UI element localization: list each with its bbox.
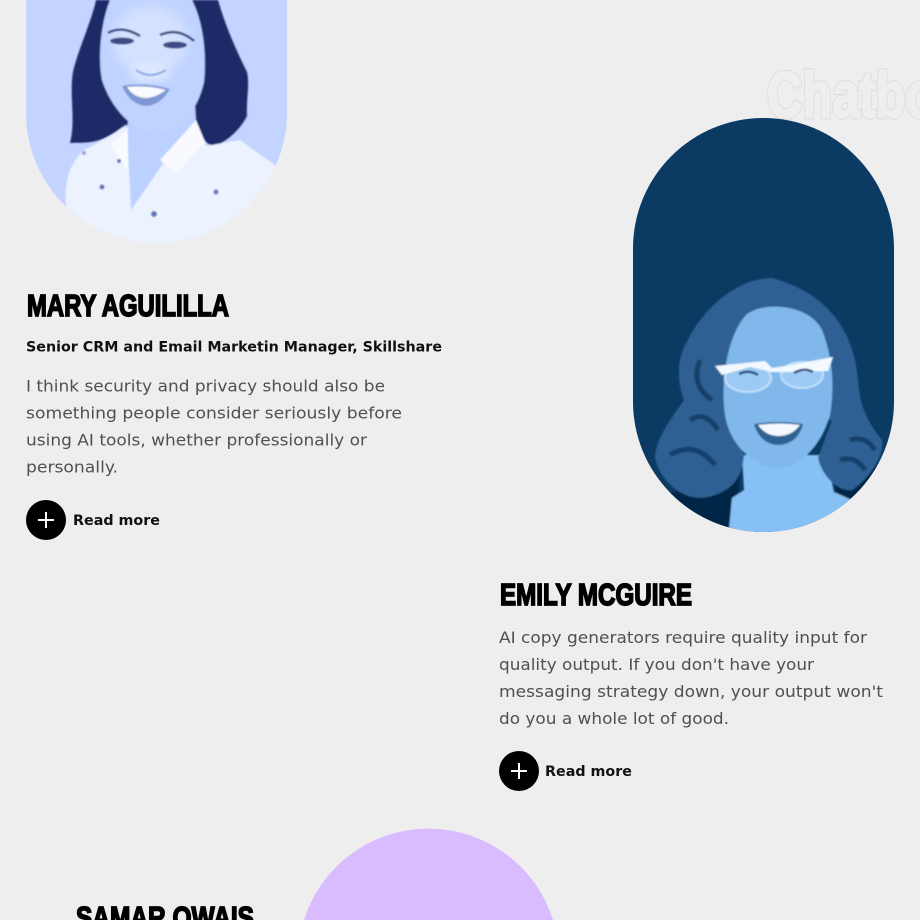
quote: do you a whole lot of good.	[499, 709, 729, 728]
nose shadow	[136, 70, 166, 75]
portrait: Samar Owais (purple backdrop)	[304, 829, 553, 920]
quote: using AI tools, whether professionally or	[26, 430, 367, 450]
mouth	[122, 85, 170, 106]
face	[724, 307, 832, 468]
quote: messaging strategy down, your output won't	[499, 682, 883, 701]
read more button	[499, 751, 632, 791]
job title: Senior CRM and Email Marketin Manager, Skillshare	[26, 340, 442, 356]
read more button: Read more	[545, 764, 632, 780]
quote	[26, 376, 402, 476]
hair	[655, 278, 882, 498]
portrait: Emily McGuire	[633, 118, 894, 540]
name heading: MARY AGUILILLA	[27, 288, 229, 323]
neck	[128, 105, 196, 210]
glasses	[725, 364, 771, 392]
profile: Emily McGuire	[499, 577, 883, 791]
shirt	[65, 126, 276, 243]
quote: quality output. If you don't have your	[499, 655, 814, 674]
shoulders	[670, 466, 878, 528]
quote: something people consider seriously before	[26, 404, 402, 422]
quote	[499, 628, 883, 728]
read more button: Read more	[73, 513, 160, 529]
portrait: Mary Aguililla	[26, 0, 287, 250]
mouth	[754, 422, 803, 445]
neck	[728, 455, 852, 540]
profile: Mary Aguililla	[26, 288, 442, 540]
eyes	[739, 372, 758, 375]
quote: personally.	[26, 458, 118, 476]
read more button	[26, 500, 160, 540]
quote: I think security and privacy should also be	[26, 376, 385, 396]
collar	[110, 120, 205, 174]
face	[100, 0, 205, 133]
name heading: EMILY MCGUIRE	[500, 577, 692, 612]
hair	[70, 0, 248, 146]
brows and eyes	[108, 30, 140, 36]
quote: AI copy generators require quality input for	[499, 628, 867, 647]
shirt details	[100, 184, 104, 190]
